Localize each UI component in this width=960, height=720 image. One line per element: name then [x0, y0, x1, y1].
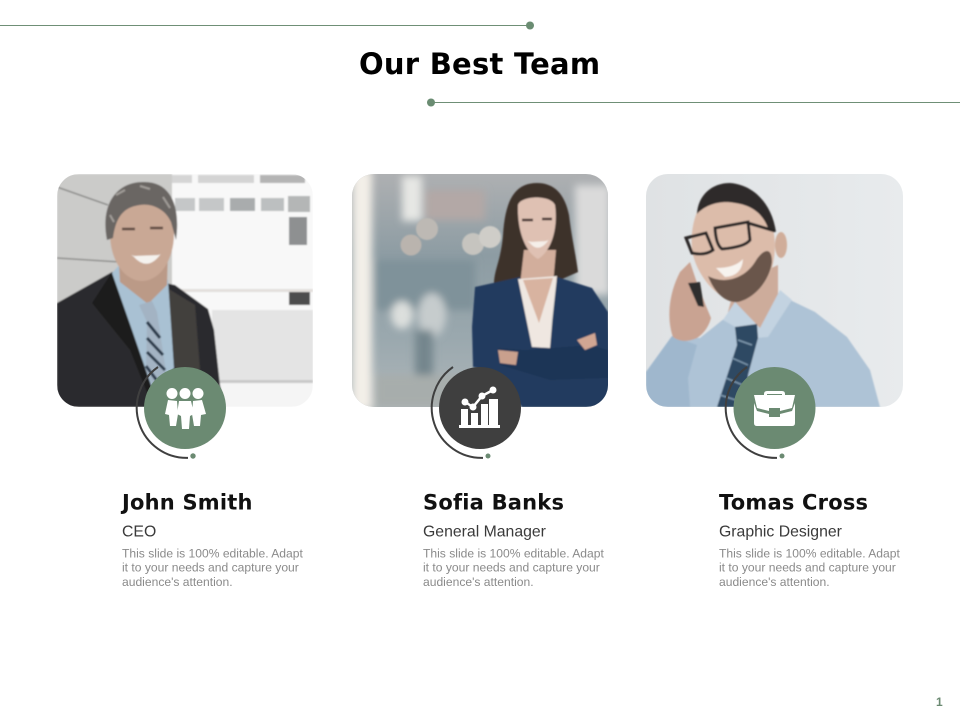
text: Tomas Cross: [719, 490, 900, 589]
text: John Smith: John Smith: [120, 490, 253, 514]
text: Sofia Banks: This slide is 100% editable. Adapt: [423, 546, 604, 560]
text: Sofia Banks: General Manager: [423, 524, 546, 540]
text: John Smith: audience's attention.: [122, 575, 233, 589]
text: Tomas Cross: Tomas Cross: [719, 490, 868, 514]
photo: Tomas Cross: [646, 174, 903, 407]
text: John Smith: it to your needs and capture your: [122, 560, 299, 574]
text: John Smith: [120, 490, 303, 589]
jacket: [472, 277, 610, 407]
head: [690, 201, 776, 293]
shirt body: [686, 300, 880, 407]
ear: [775, 232, 787, 258]
neck: [520, 250, 556, 285]
panel: Tomas Cross: [646, 174, 903, 589]
text: Sofia Banks: audience's attention.: [423, 575, 534, 589]
icon: briefcase badge: [726, 367, 816, 458]
hair: [494, 183, 578, 288]
shirt: [112, 262, 174, 388]
hand: [669, 262, 711, 341]
lower title line with dot: [427, 98, 960, 106]
face: [518, 197, 556, 259]
title: Our Best Team: [359, 47, 600, 81]
text: Tomas Cross: it to your needs and capture your: [719, 560, 896, 574]
glasses: [686, 222, 775, 254]
neck: [728, 265, 778, 335]
icon: three people: [165, 388, 206, 429]
tie: [139, 301, 166, 388]
page number: 1: [936, 695, 943, 709]
tie: [717, 324, 758, 407]
jacket: [57, 272, 225, 407]
photo: Sofia Banks: [352, 170, 612, 410]
text: Tomas Cross: This slide is 100% editable. Adapt: [719, 546, 900, 560]
beard: [708, 251, 772, 302]
panel: Sofia Banks: [352, 170, 612, 589]
arms: [506, 347, 607, 379]
icon: team badge: [137, 367, 226, 459]
text: Tomas Cross: audience's attention.: [719, 575, 830, 589]
text: Sofia Banks: [423, 490, 604, 589]
collar: [723, 290, 792, 338]
hair: [697, 183, 776, 232]
panel: John Smith: [57, 174, 313, 589]
icon: briefcase: [754, 391, 795, 426]
text: Tomas Cross: Graphic Designer: [719, 524, 842, 540]
neck and head: [118, 262, 168, 304]
text: Sofia Banks: it to your needs and capture your: [423, 560, 600, 574]
text: John Smith: This slide is 100% editable. Adapt: [122, 546, 303, 560]
blouse: [518, 276, 557, 348]
top decorative line with dot: [0, 22, 534, 30]
photo: John Smith: [57, 174, 313, 407]
phone: [688, 282, 704, 307]
icon: bar chart with line: [459, 386, 500, 428]
icon: growth chart badge: [432, 367, 521, 458]
text: John Smith: CEO: [122, 524, 156, 540]
text: Sofia Banks: Sofia Banks: [423, 490, 564, 514]
